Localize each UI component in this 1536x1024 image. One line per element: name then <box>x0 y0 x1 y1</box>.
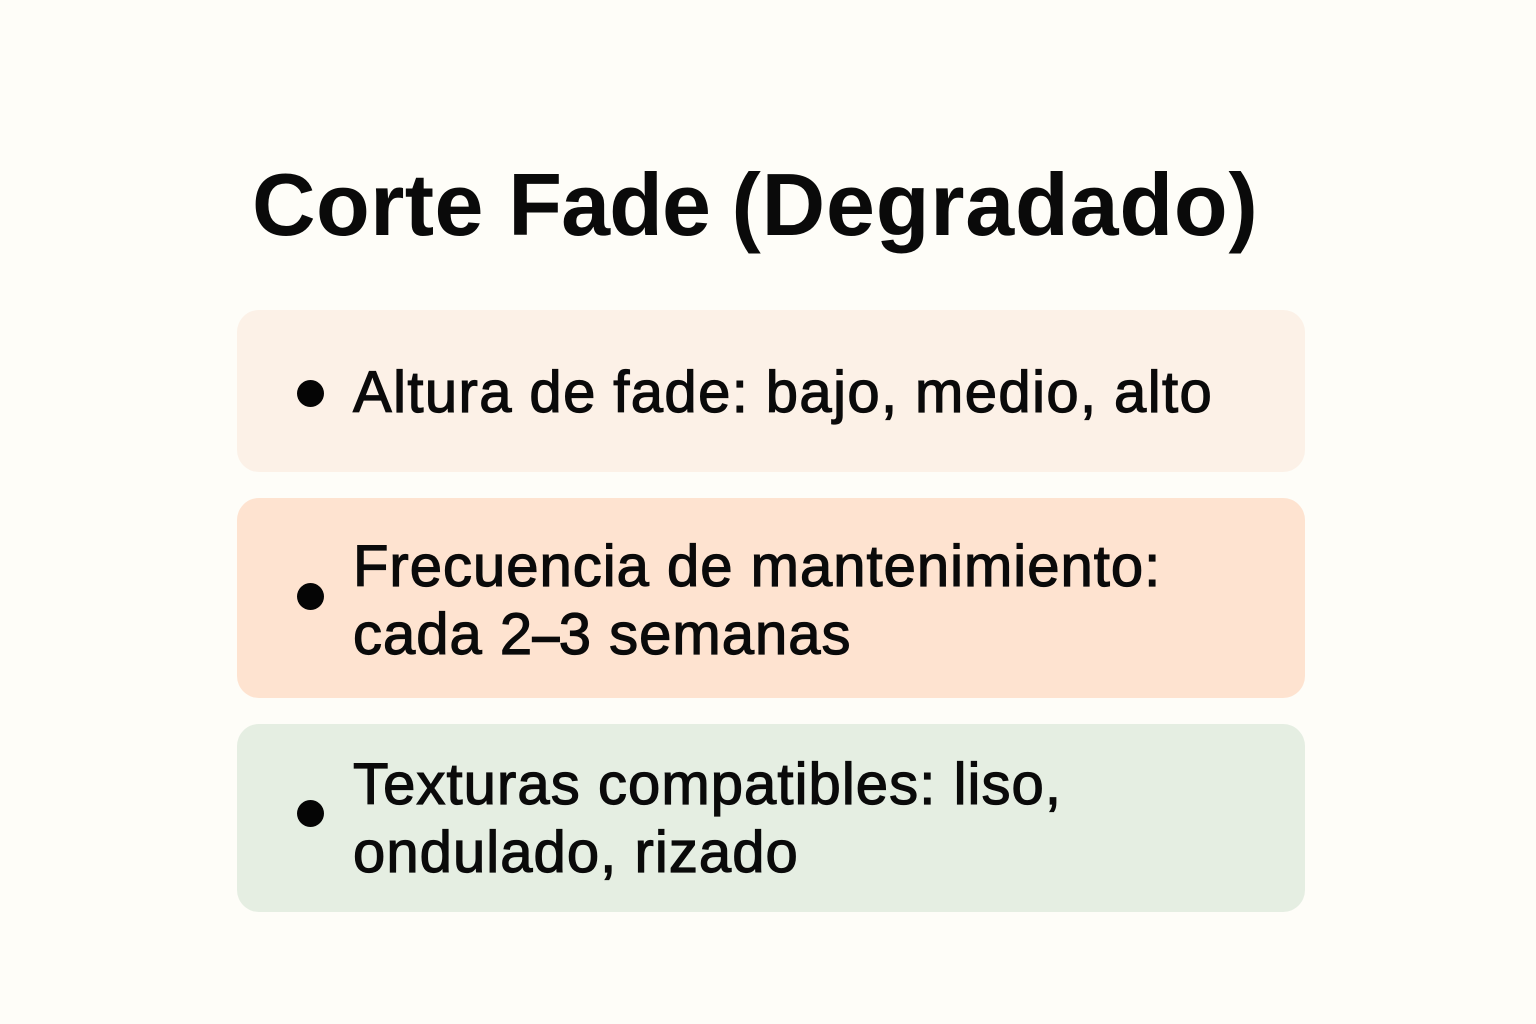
text: texturas compatibles: ondulado, rizado <box>353 820 799 885</box>
panel: frecuencia de mantenimiento <box>237 498 1305 698</box>
panel: altura de fade <box>237 310 1305 472</box>
text: texturas compatibles: Texturas compatibles: liso, <box>353 752 1062 817</box>
text: altura de fade: Altura de fade: bajo, medio, alto <box>353 360 1213 425</box>
title: Corte Fade (Degradado) <box>252 155 1259 254</box>
icon: bullet 2 <box>297 583 324 610</box>
text: frecuencia de mantenimiento: Frecuencia de mantenimiento: <box>353 534 1161 599</box>
text: texturas compatibles <box>353 752 1062 885</box>
text: frecuencia de mantenimiento <box>353 534 1161 667</box>
panel: texturas compatibles <box>237 724 1305 912</box>
icon: bullet 3 <box>297 800 324 827</box>
icon: bullet 1 <box>297 380 324 407</box>
text: frecuencia de mantenimiento: cada 2–3 semanas <box>353 602 851 667</box>
